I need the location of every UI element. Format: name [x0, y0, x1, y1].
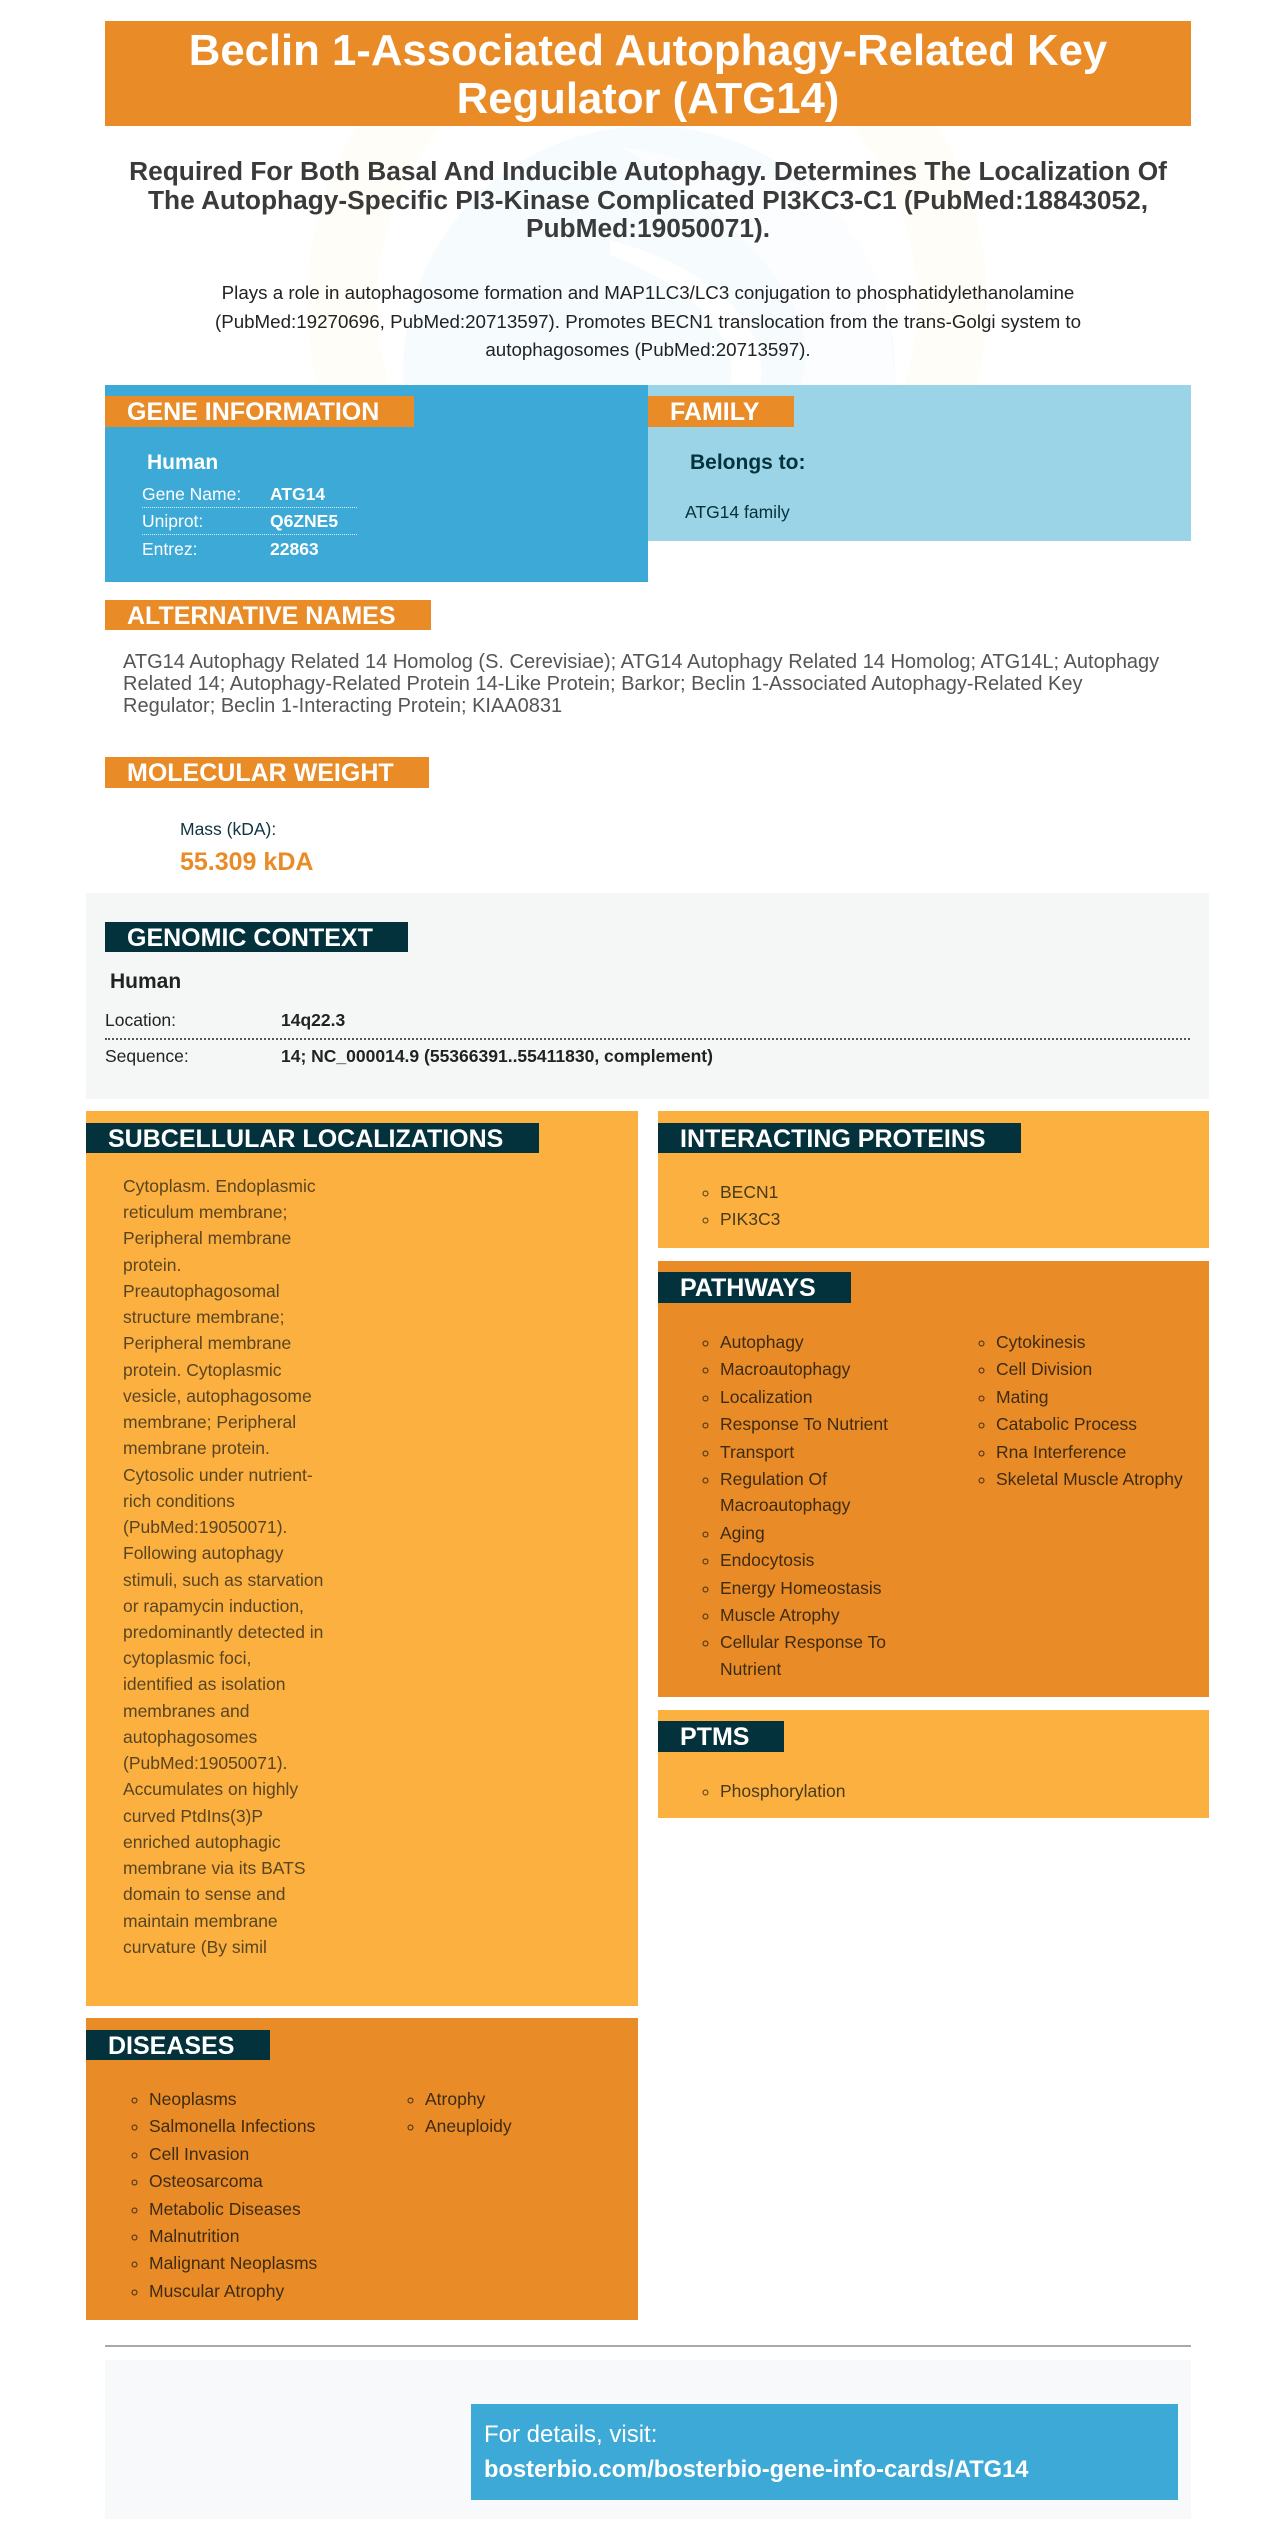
- alternative names text: [123, 651, 1159, 717]
- subcellular description text: protein.: [123, 1255, 181, 1275]
- subcellular description text: [123, 1176, 323, 1957]
- interacting proteins list: PIK3C3: [720, 1209, 780, 1229]
- pathways list column 1: Macroautophagy: [720, 1495, 850, 1515]
- callout: details link: [471, 2404, 1178, 2500]
- location row: 14q22.3: [281, 1010, 345, 1030]
- panel: genomic context: [86, 893, 1209, 1099]
- ptms list: Phosphorylation: [720, 1781, 846, 1801]
- alternative names text: Regulator; Beclin 1-Interacting Protein; KIAA0831: [123, 695, 562, 717]
- pathways list column 1: Regulation Of: [720, 1469, 827, 1489]
- heading: pathways: PATHWAYS: [680, 1274, 816, 1302]
- uniprot row: Q6ZNE5: [270, 511, 338, 531]
- uniprot row: Uniprot:: [142, 511, 203, 531]
- pathways list column 1: Localization: [720, 1387, 812, 1407]
- subtitle: [129, 156, 1167, 243]
- pathways list column 2: Catabolic Process: [996, 1414, 1137, 1434]
- subcellular description text: membrane protein.: [123, 1438, 270, 1458]
- diseases list column 1: Malignant Neoplasms: [149, 2253, 317, 2273]
- sequence row: Sequence:: [105, 1046, 189, 1066]
- diseases list column 2: [408, 2089, 512, 2136]
- pathways list column 1: Response To Nutrient: [720, 1414, 888, 1434]
- heading: interacting proteins: INTERACTING PROTEINS: [680, 1125, 986, 1153]
- diseases list column 1: Malnutrition: [149, 2226, 239, 2246]
- subtitle: Required For Both Basal And Inducible Autophagy. Determines The Localization Of: [129, 156, 1167, 186]
- alternative names text: ATG14 Autophagy Related 14 Homolog (S. Cerevisiae); ATG14 Autophagy Related 14 Homolog; ATG14L; Autophagy: [123, 651, 1159, 673]
- description text: Plays a role in autophagosome formation and MAP1LC3/LC3 conjugation to phosphatidylethanolamine: [222, 282, 1074, 303]
- pathways list column 1: Cellular Response To: [720, 1632, 886, 1652]
- gene name row: Gene Name:: [142, 484, 241, 504]
- subcellular description text: Preautophagosomal: [123, 1281, 280, 1301]
- visit label: For details, visit:: [484, 2421, 657, 2448]
- pathways list column 1: Nutrient: [720, 1659, 781, 1679]
- subcellular description text: protein. Cytoplasmic: [123, 1360, 282, 1380]
- subcellular description text: or rapamycin induction,: [123, 1596, 304, 1616]
- diseases list column 1: [132, 2089, 317, 2301]
- subcellular description text: rich conditions: [123, 1491, 235, 1511]
- diseases list column 1: Metabolic Diseases: [149, 2199, 301, 2219]
- description text: [215, 282, 1081, 360]
- url: bosterbio.com/bosterbio-gene-info-cards/ATG14: [484, 2457, 1028, 2483]
- subcellular description text: vesicle, autophagosome: [123, 1386, 312, 1406]
- pathways list column 2: Cytokinesis: [996, 1332, 1085, 1352]
- heading: pathways: [658, 1272, 851, 1303]
- subcellular description text: autophagosomes: [123, 1727, 257, 1747]
- heading: molecular weight: MOLECULAR WEIGHT: [127, 759, 394, 787]
- pathways list column 1: Transport: [720, 1442, 794, 1462]
- diseases list column 1: Cell Invasion: [149, 2144, 249, 2164]
- pathways list column 2: Skeletal Muscle Atrophy: [996, 1469, 1183, 1489]
- pathways list column 1: Muscle Atrophy: [720, 1605, 840, 1625]
- diseases list column 2: Aneuploidy: [425, 2116, 512, 2136]
- subcellular description text: stimuli, such as starvation: [123, 1570, 323, 1590]
- panel: footer: [105, 2360, 1191, 2519]
- pathways list column 1: Autophagy: [720, 1332, 804, 1352]
- title: Regulator (ATG14): [457, 74, 839, 123]
- heading: alternative names: ALTERNATIVE NAMES: [127, 602, 396, 630]
- heading: family: FAMILY: [670, 398, 759, 426]
- pathways list column 1: [702, 1332, 888, 1679]
- description text: (PubMed:19270696, PubMed:20713597). Promotes BECN1 translocation from the trans-Golgi system to: [215, 311, 1081, 332]
- pathways list column 1: Macroautophagy: [720, 1359, 850, 1379]
- subcellular description text: Cytoplasm. Endoplasmic: [123, 1176, 316, 1196]
- mass value: 55.309 kDA: [180, 848, 313, 876]
- panel: pathways: [658, 1261, 1209, 1697]
- subcellular description text: Peripheral membrane: [123, 1228, 291, 1248]
- entrez row: [142, 539, 319, 559]
- diseases list column 2: Atrophy: [425, 2089, 485, 2109]
- pathways list column 2: Mating: [996, 1387, 1049, 1407]
- subtitle: PubMed:19050071).: [526, 213, 770, 243]
- diseases list column 1: Neoplasms: [149, 2089, 237, 2109]
- heading: subcellular localizations: SUBCELLULAR LOCALIZATIONS: [108, 1125, 503, 1153]
- belongs to label: Belongs to:: [690, 451, 806, 474]
- panel: subcellular localizations: [86, 1111, 638, 2006]
- interacting proteins list: [702, 1182, 780, 1229]
- pathways list column 1: Energy Homeostasis: [720, 1578, 881, 1598]
- description text: autophagosomes (PubMed:20713597).: [485, 339, 811, 360]
- species label: Human: [147, 451, 218, 474]
- panel: gene information: [105, 385, 648, 582]
- alternative names text: Related 14; Autophagy-Related Protein 14-Like Protein; Barkor; Beclin 1-Associated Autophagy-Related Key: [123, 673, 1082, 695]
- location row: [105, 1007, 1190, 1040]
- subcellular description text: reticulum membrane;: [123, 1202, 287, 1222]
- location row: Location:: [105, 1010, 176, 1030]
- diseases list column 1: Osteosarcoma: [149, 2171, 263, 2191]
- subcellular description text: maintain membrane: [123, 1911, 278, 1931]
- title: Beclin 1-Associated Autophagy-Related Key: [189, 26, 1107, 75]
- heading: ptms: [658, 1721, 784, 1752]
- subcellular description text: enriched autophagic: [123, 1832, 281, 1852]
- heading: diseases: [86, 2030, 270, 2060]
- subcellular description text: (PubMed:19050071).: [123, 1517, 287, 1537]
- subcellular description text: domain to sense and: [123, 1884, 285, 1904]
- subcellular description text: curved PtdIns(3)P: [123, 1806, 263, 1826]
- subcellular description text: curvature (By simil: [123, 1937, 267, 1957]
- heading: ptms: PTMS: [680, 1723, 749, 1751]
- interacting proteins list: BECN1: [720, 1182, 778, 1202]
- subcellular description text: membrane; Peripheral: [123, 1412, 296, 1432]
- pathways list column 1: Aging: [720, 1523, 765, 1543]
- subcellular description text: Following autophagy: [123, 1543, 284, 1563]
- subcellular description text: predominantly detected in: [123, 1622, 323, 1642]
- subcellular description text: structure membrane;: [123, 1307, 284, 1327]
- background watermark logo: [403, 126, 895, 385]
- heading: genomic context: GENOMIC CONTEXT: [127, 924, 373, 952]
- entrez row: 22863: [270, 539, 319, 559]
- heading: gene information: GENE INFORMATION: [127, 398, 379, 426]
- title: [105, 21, 1191, 126]
- subcellular description text: Peripheral membrane: [123, 1333, 291, 1353]
- pathways list column 1: Endocytosis: [720, 1550, 814, 1570]
- family value: ATG14 family: [685, 502, 790, 522]
- pathways list column 2: [978, 1332, 1183, 1489]
- subcellular description text: membranes and: [123, 1701, 249, 1721]
- subcellular description text: Cytosolic under nutrient-: [123, 1465, 313, 1485]
- pathways list column 2: Cell Division: [996, 1359, 1092, 1379]
- gene name row: [142, 481, 357, 508]
- panel: interacting proteins: [658, 1111, 1209, 1248]
- diseases list column 1: Salmonella Infections: [149, 2116, 315, 2136]
- sequence row: 14; NC_000014.9 (55366391..55411830, complement): [281, 1046, 713, 1066]
- subtitle: The Autophagy-Specific PI3-Kinase Complicated PI3KC3-C1 (PubMed:18843052,: [148, 185, 1148, 215]
- subcellular description text: (PubMed:19050071).: [123, 1753, 287, 1773]
- entrez row: Entrez:: [142, 539, 197, 559]
- panel: family: [648, 385, 1191, 541]
- heading: family: [648, 396, 794, 427]
- mass label: Mass (kDA):: [180, 819, 276, 839]
- panel: ptms: [658, 1710, 1209, 1818]
- diseases list column 1: Muscular Atrophy: [149, 2281, 284, 2301]
- panel: diseases: [86, 2018, 638, 2320]
- pathways list column 2: Rna Interference: [996, 1442, 1126, 1462]
- subcellular description text: membrane via its BATS: [123, 1858, 306, 1878]
- species label: Human: [110, 970, 181, 993]
- subcellular description text: identified as isolation: [123, 1674, 285, 1694]
- gene name row: ATG14: [270, 484, 325, 504]
- heading: diseases: DISEASES: [108, 2032, 234, 2060]
- subcellular description text: Accumulates on highly: [123, 1779, 298, 1799]
- uniprot row: [142, 508, 357, 535]
- subcellular description text: cytoplasmic foci,: [123, 1648, 251, 1668]
